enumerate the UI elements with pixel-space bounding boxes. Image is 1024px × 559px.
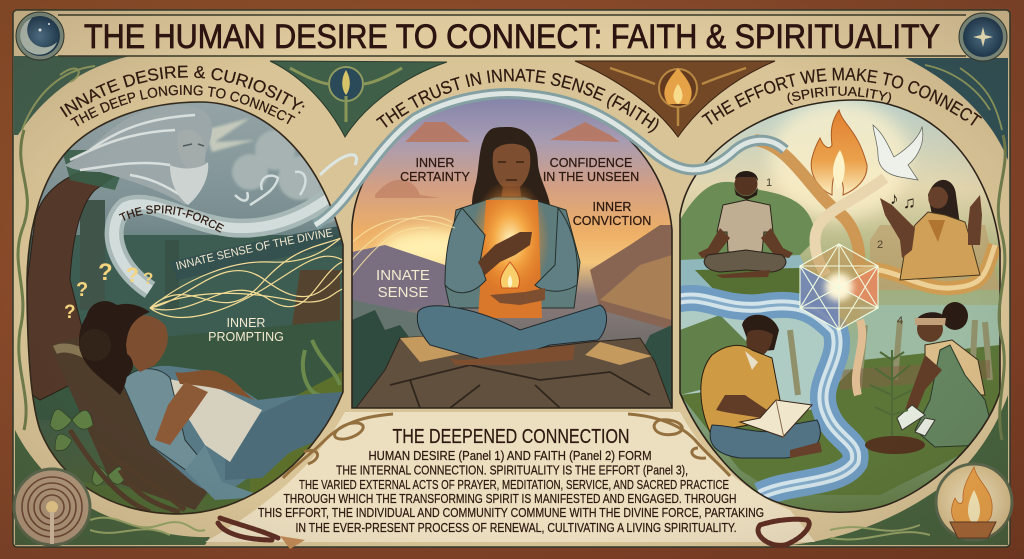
spandrel: lower-right green corner — [790, 395, 1008, 545]
spandrel: top-right night corner — [905, 58, 1008, 160]
vine: right border — [998, 135, 1005, 440]
tree trunk — [28, 171, 115, 400]
golden waves from the head — [150, 238, 342, 318]
sky clouds — [205, 118, 343, 223]
body text: THROUGH WHICH THE TRANSFORMING SPIRIT IS MANIFESTED AND ENGAGED. THROUGH — [284, 492, 736, 506]
singing woman — [880, 180, 982, 280]
question marks: ? — [143, 269, 153, 288]
flame — [811, 110, 867, 195]
body text: IN THE EVER-PRESENT PROCESS OF RENEWAL, CULTIVATING A LIVING SPIRITUALITY. — [296, 521, 736, 535]
title banner — [58, 15, 966, 56]
sapling — [870, 350, 912, 445]
number labels: 1 — [766, 177, 772, 189]
label: innate sense: SENSE — [378, 284, 428, 301]
knotwork: bronze ornament right of text panel — [628, 414, 730, 476]
number labels: 4 — [897, 315, 903, 327]
label: inner prompting: PROMPTING — [208, 330, 284, 344]
warm radiance — [770, 100, 910, 220]
open book — [740, 400, 812, 438]
golden ribbons — [755, 140, 995, 288]
label: confidence in the unseen: CONFIDENCE — [550, 156, 632, 170]
number labels — [766, 177, 903, 327]
beads: right prayer beads — [758, 519, 809, 545]
label: confidence in the unseen: IN THE UNSEEN — [543, 170, 639, 184]
spandrel: top-left green corner — [14, 56, 130, 135]
spirit figure: flowing hair and beard — [65, 105, 212, 205]
number labels: 2 — [877, 239, 883, 251]
body text: THIS EFFORT, THE INDIVIDUAL AND COMMUNITY COMMUNE WITH THE DIVINE FORCE, PARTAKING — [258, 506, 764, 520]
arrow: flowing spirit ribbon linking the panels — [315, 94, 785, 225]
label: innate sense of the divine: INNATE SENSE OF THE DIVINE — [176, 228, 333, 270]
heading: the deepened connection: THE DEEPENED CONNECTION — [392, 426, 630, 448]
tree foliage — [64, 150, 120, 190]
dark label band — [179, 226, 342, 280]
music notes: ♪ — [890, 189, 898, 208]
river of renewal — [676, 298, 862, 495]
mountains — [352, 225, 672, 408]
panel 1: innate desire and curiosity — [20, 95, 360, 520]
plants — [50, 409, 125, 485]
label: innate sense: INNATE — [376, 267, 430, 284]
knotwork: bronze ornament left of text panel — [283, 414, 393, 478]
curved heading: the trust in innate sense: THE TRUST IN INNATE SENSE (FAITH) — [376, 68, 659, 134]
beads: left prayer beads — [218, 518, 305, 549]
body text: THE VARIED EXTERNAL ACTS OF PRAYER, MEDITATION, SERVICE, AND SACRED PRACTICE — [299, 478, 729, 492]
sunset clouds — [375, 122, 620, 198]
question marks: ? — [64, 302, 76, 323]
meditating woman — [417, 127, 607, 365]
icon: labyrinth medallion — [14, 469, 90, 545]
wind swirls — [235, 172, 305, 205]
label: inner conviction: INNER — [593, 200, 631, 214]
curved subheading: spirituality: (SPIRITUALITY) — [788, 86, 892, 105]
spandrel: green ornament between panels 1 and 2 — [270, 61, 447, 137]
spandrel: brown flame ornament between panels 2 and 3 — [575, 61, 775, 137]
label: inner certainty: INNER — [416, 156, 454, 170]
question marks — [64, 263, 152, 318]
label: inner prompting: INNER — [227, 316, 265, 330]
dove — [873, 125, 923, 180]
panel 2: trust in innate sense — [345, 90, 680, 410]
sacred geometry star — [800, 244, 878, 330]
icon: star medallion — [959, 13, 1007, 61]
panel 2 outline — [352, 93, 672, 408]
tree roots — [70, 430, 185, 512]
question marks: ? — [76, 279, 88, 301]
panel 1 outline — [27, 102, 343, 514]
panel: the deepened connection text — [205, 412, 815, 542]
title: THE HUMAN DESIRE TO CONNECT: FAITH & SPIRITUALITY — [84, 18, 940, 56]
meditating man — [698, 171, 793, 278]
spirit-force ribbon — [114, 185, 345, 290]
music notes: ♫ — [903, 193, 916, 212]
music notes — [892, 194, 914, 208]
label: the spirit-force: THE SPIRIT-FORCE — [118, 205, 224, 233]
writing man — [701, 315, 822, 458]
curved heading: the effort we make to connect: THE EFFORT WE MAKE TO CONNECT — [701, 68, 982, 126]
panel 3: the effort to connect — [675, 95, 1010, 520]
spandrel: lower-left green corner — [15, 430, 210, 545]
curved heading: innate desire and curiosity: INNATE DESIRE & CURIOSITY: — [60, 66, 305, 118]
forest backdrop — [28, 200, 342, 494]
body text: HUMAN DESIRE (Panel 1) AND FAITH (Panel 2) FORM — [368, 449, 652, 463]
body text — [258, 449, 764, 535]
icon: flame bowl medallion — [936, 464, 1012, 540]
label: inner certainty: CERTAINTY — [400, 170, 471, 184]
reclining woman — [50, 301, 343, 510]
sun glow — [380, 228, 480, 268]
rock — [356, 335, 672, 408]
vine: left border — [18, 130, 27, 430]
innate sense light waves — [352, 215, 456, 276]
icon: crescent moon medallion — [16, 12, 64, 60]
gardening woman — [897, 302, 990, 447]
planted soil — [865, 436, 925, 454]
question marks: ? — [126, 264, 139, 287]
label: inner conviction: CONVICTION — [573, 214, 651, 228]
panel 3 outline — [680, 100, 1000, 512]
body text: THE INTERNAL CONNECTION. SPIRITUALITY IS THE EFFORT (Panel 3), — [336, 464, 688, 478]
question marks: ? — [98, 259, 113, 286]
curved subheading: the deep longing to connect: THE DEEP LONGING TO CONNECT — [70, 85, 296, 126]
distant forest and river — [680, 182, 1000, 495]
